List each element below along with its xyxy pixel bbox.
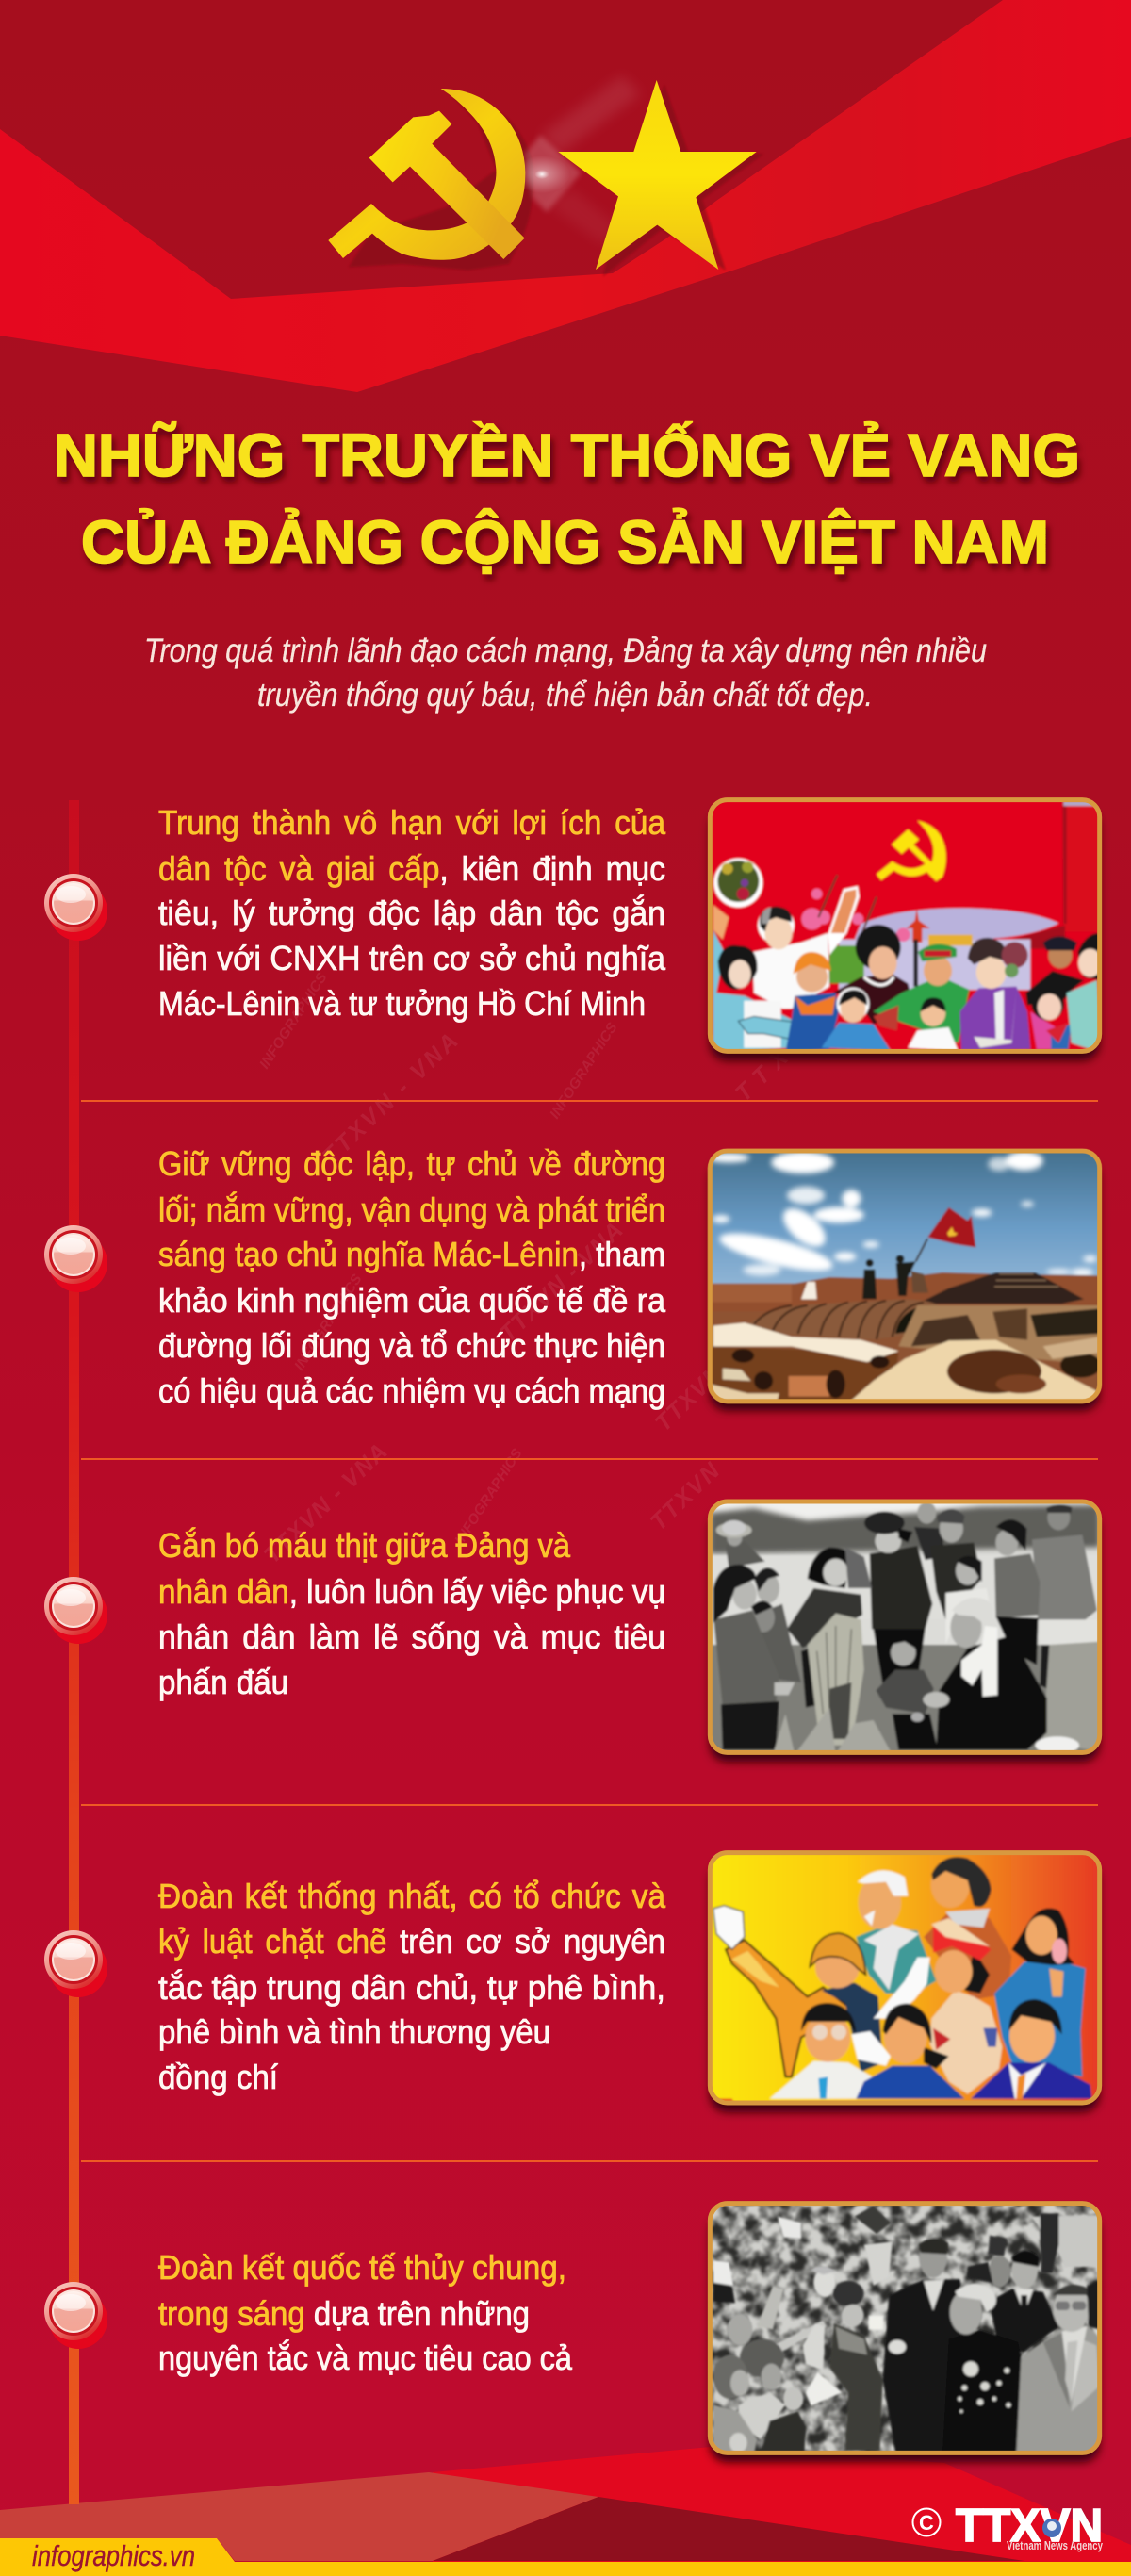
copyright mark: C bbox=[919, 2511, 934, 2535]
timeline node 4 bbox=[44, 1930, 107, 1997]
text block 2: đường lối đúng và tổ chức thực hiện bbox=[158, 1326, 665, 1365]
front left woman bbox=[713, 1565, 779, 1750]
hammer bbox=[369, 111, 525, 259]
blossoms bbox=[801, 889, 910, 942]
woman purple bbox=[959, 987, 1030, 1051]
watermarks: TTXVN - VNA bbox=[318, 1028, 463, 1170]
text block 2: Giữ vững độc lập, tự chủ về đường bbox=[158, 1144, 665, 1183]
raised arm bbox=[726, 1940, 851, 2076]
text block 3: nhân dân làm lẽ sống và mục tiêu bbox=[158, 1617, 665, 1656]
boy blue bbox=[822, 1023, 891, 1051]
watermarks: INFOGRAPHICS bbox=[256, 970, 331, 1072]
sickle bbox=[328, 89, 525, 260]
timeline node 2 bbox=[44, 1225, 107, 1292]
background men bbox=[914, 1501, 944, 1560]
lens flare bbox=[514, 75, 641, 245]
raised arm bbox=[828, 886, 860, 955]
watermarks: TTXVN bbox=[730, 1009, 830, 1107]
timeline node 5 bbox=[44, 2282, 107, 2349]
watermarks: INFOGRAPHICS bbox=[547, 1020, 621, 1122]
woman left bbox=[713, 930, 798, 1053]
panel: item 5 bbox=[44, 2204, 1101, 2462]
text block 2: lối; nắm vững, vận dụng và phát triển bbox=[158, 1190, 665, 1229]
text block 4 bbox=[158, 1877, 666, 2096]
watermarks: TTXVN - VNA bbox=[495, 1217, 628, 1347]
second woman left bbox=[751, 1567, 801, 1682]
worker bbox=[785, 993, 839, 1053]
panel: item 1 bbox=[44, 800, 1102, 1060]
title: NHỮNG TRUYỀN THỐNG VẺ VANG bbox=[54, 420, 1080, 489]
student girl bbox=[856, 2066, 964, 2099]
text block 1: tiêu, lý tưởng độc lập dân tộc gắn bbox=[158, 894, 665, 932]
bunker bbox=[745, 1299, 940, 1340]
flags bbox=[855, 2206, 891, 2234]
woman with rice bbox=[787, 1548, 872, 1708]
text block 4: đồng chí bbox=[158, 2058, 278, 2096]
woman with lotus bbox=[994, 1959, 1086, 2076]
footer yellow strip bbox=[0, 2538, 1131, 2576]
text block 2: sáng tạo chủ nghĩa Mác-Lênin, tham bbox=[158, 1235, 665, 1273]
title: CỦA ĐẢNG CỘNG SẢN VIỆT NAM bbox=[81, 507, 1049, 576]
agency letters: TTXVN bbox=[956, 2501, 1103, 2551]
dividers bbox=[81, 1100, 1098, 2162]
Ho Chi Minh bbox=[942, 2330, 1027, 2453]
photo 5: welcome crowd bbox=[710, 2204, 1101, 2462]
far right man bbox=[1032, 1504, 1098, 1689]
worker with helmet bbox=[822, 1982, 883, 2072]
star bbox=[558, 80, 757, 270]
tall woman bbox=[864, 1512, 932, 1685]
timeline line bbox=[69, 800, 79, 2504]
man white shirt bbox=[752, 933, 829, 1009]
header ribbon shapes bbox=[0, 0, 1131, 392]
globe bbox=[1042, 2519, 1061, 2537]
child white shirt bbox=[945, 1556, 990, 1645]
copyright mark bbox=[912, 2509, 941, 2535]
tower bbox=[907, 908, 930, 943]
man dark coat bbox=[1025, 971, 1084, 1006]
flowers bbox=[958, 2361, 1011, 2413]
children left bbox=[728, 2314, 752, 2345]
text block 1: dân tộc và giai cấp, kiên định mục bbox=[158, 849, 665, 888]
emblem: hammer and sickle with star bbox=[328, 75, 763, 276]
front boy bbox=[876, 1634, 938, 1750]
text block 1: Mác-Lênin và tư tưởng Hồ Chí Minh bbox=[158, 984, 646, 1023]
text block 4: tắc tập trung dân chủ, tự phê bình, bbox=[158, 1968, 665, 2007]
boy behind bbox=[930, 1509, 982, 1619]
TTXVN logo bbox=[912, 2501, 1103, 2552]
man behind right bbox=[990, 2289, 1058, 2352]
title bbox=[54, 420, 1080, 576]
photo 1: people under party flag bbox=[710, 800, 1102, 1060]
text block 5: Đoàn kết quốc tế thủy chung, bbox=[158, 2248, 566, 2287]
woman dark dress bbox=[832, 974, 914, 1025]
watermarks bbox=[256, 970, 830, 1568]
text block 2: khảo kinh nghiệm của quốc tế đề ra bbox=[158, 1281, 666, 1320]
text block 2 bbox=[158, 1144, 666, 1410]
watermarks: TTXVN bbox=[646, 1457, 726, 1535]
girl with white shirt bbox=[908, 1027, 959, 1051]
text block 2: có hiệu quả các nhiệm vụ cách mạng bbox=[158, 1371, 665, 1410]
doctor bbox=[770, 2061, 875, 2099]
watermarks: TTXVN - VNA bbox=[650, 1306, 783, 1436]
emblem shadows bbox=[349, 85, 763, 276]
text block 5 bbox=[158, 2248, 573, 2377]
panel: item 3 bbox=[44, 1501, 1100, 1762]
watermarks: INFOGRAPHICS bbox=[291, 1272, 366, 1373]
photo 3: Ho Chi Minh with farmers bbox=[710, 1501, 1100, 1762]
agency tagline: Vietnam News Agency bbox=[1007, 2539, 1103, 2552]
right woman bbox=[1067, 980, 1101, 1053]
rice bundle bbox=[808, 1614, 864, 1746]
footer ribbon shapes bbox=[0, 2447, 1131, 2562]
far left person with hat bbox=[716, 1520, 765, 1567]
soldiers bbox=[862, 1255, 928, 1299]
text block 1: liền với CNXH trên cơ sở chủ nghĩa bbox=[158, 939, 666, 977]
text block 5: trong sáng dựa trên những bbox=[158, 2294, 530, 2333]
girl pink bbox=[1030, 1011, 1056, 1049]
subtitle: truyền thống quý báu, thể hiện bản chất tốt đẹp. bbox=[257, 677, 873, 714]
text block 5: nguyên tắc và mục tiêu cao cả bbox=[158, 2338, 573, 2377]
watermarks: TTXVN - VNA bbox=[259, 1438, 392, 1568]
text block 1 bbox=[158, 803, 666, 1023]
photo 2: victory flag over bunker bbox=[709, 1151, 1101, 1411]
woman right bbox=[994, 1519, 1040, 1665]
small hammer and sickle bbox=[877, 821, 946, 881]
policewoman bbox=[930, 1991, 1002, 2094]
subtitle: Trong quá trình lãnh đạo cách mạng, Đảng ta xây dựng nên nhiều bbox=[144, 632, 987, 669]
text block 3: Gắn bó máu thịt giữa Đảng và bbox=[158, 1526, 571, 1565]
panel: item 2 bbox=[44, 1144, 1101, 1411]
man in light suit bbox=[1016, 2325, 1101, 2453]
text block 3 bbox=[158, 1526, 665, 1701]
text block 3: phấn đấu bbox=[158, 1663, 288, 1701]
bouquet left bbox=[713, 859, 762, 908]
text block 4: phê bình và tình thương yêu bbox=[158, 2012, 550, 2051]
text block 1: Trung thành vô hạn với lợi ích của bbox=[158, 803, 666, 842]
man in black suit bbox=[883, 2279, 980, 2453]
girl and front bbox=[813, 2269, 836, 2297]
woman back bbox=[924, 1911, 1011, 2000]
soldier bbox=[874, 980, 969, 1043]
panel: item 4 bbox=[44, 1853, 1100, 2112]
text block 4: Đoàn kết thống nhất, có tổ chức và bbox=[158, 1877, 666, 1915]
subtitle bbox=[144, 632, 987, 714]
flag bbox=[927, 1207, 975, 1247]
young man bbox=[971, 2062, 1091, 2099]
text block 3: nhân dân, luôn luôn lấy việc phục vụ bbox=[158, 1572, 665, 1611]
text block 4: kỷ luật chặt chẽ trên cơ sở nguyên bbox=[158, 1922, 665, 1961]
photo 4: poster of Vietnamese people bbox=[710, 1853, 1100, 2112]
timeline node 3 bbox=[44, 1577, 107, 1644]
watermarks: INFOGRAPHICS bbox=[451, 1446, 526, 1548]
old man bbox=[856, 1928, 936, 1994]
footer site name: infographics.vn bbox=[32, 2539, 195, 2572]
timeline node 1 bbox=[44, 874, 107, 941]
Ho Chi Minh bbox=[923, 1598, 1047, 1750]
